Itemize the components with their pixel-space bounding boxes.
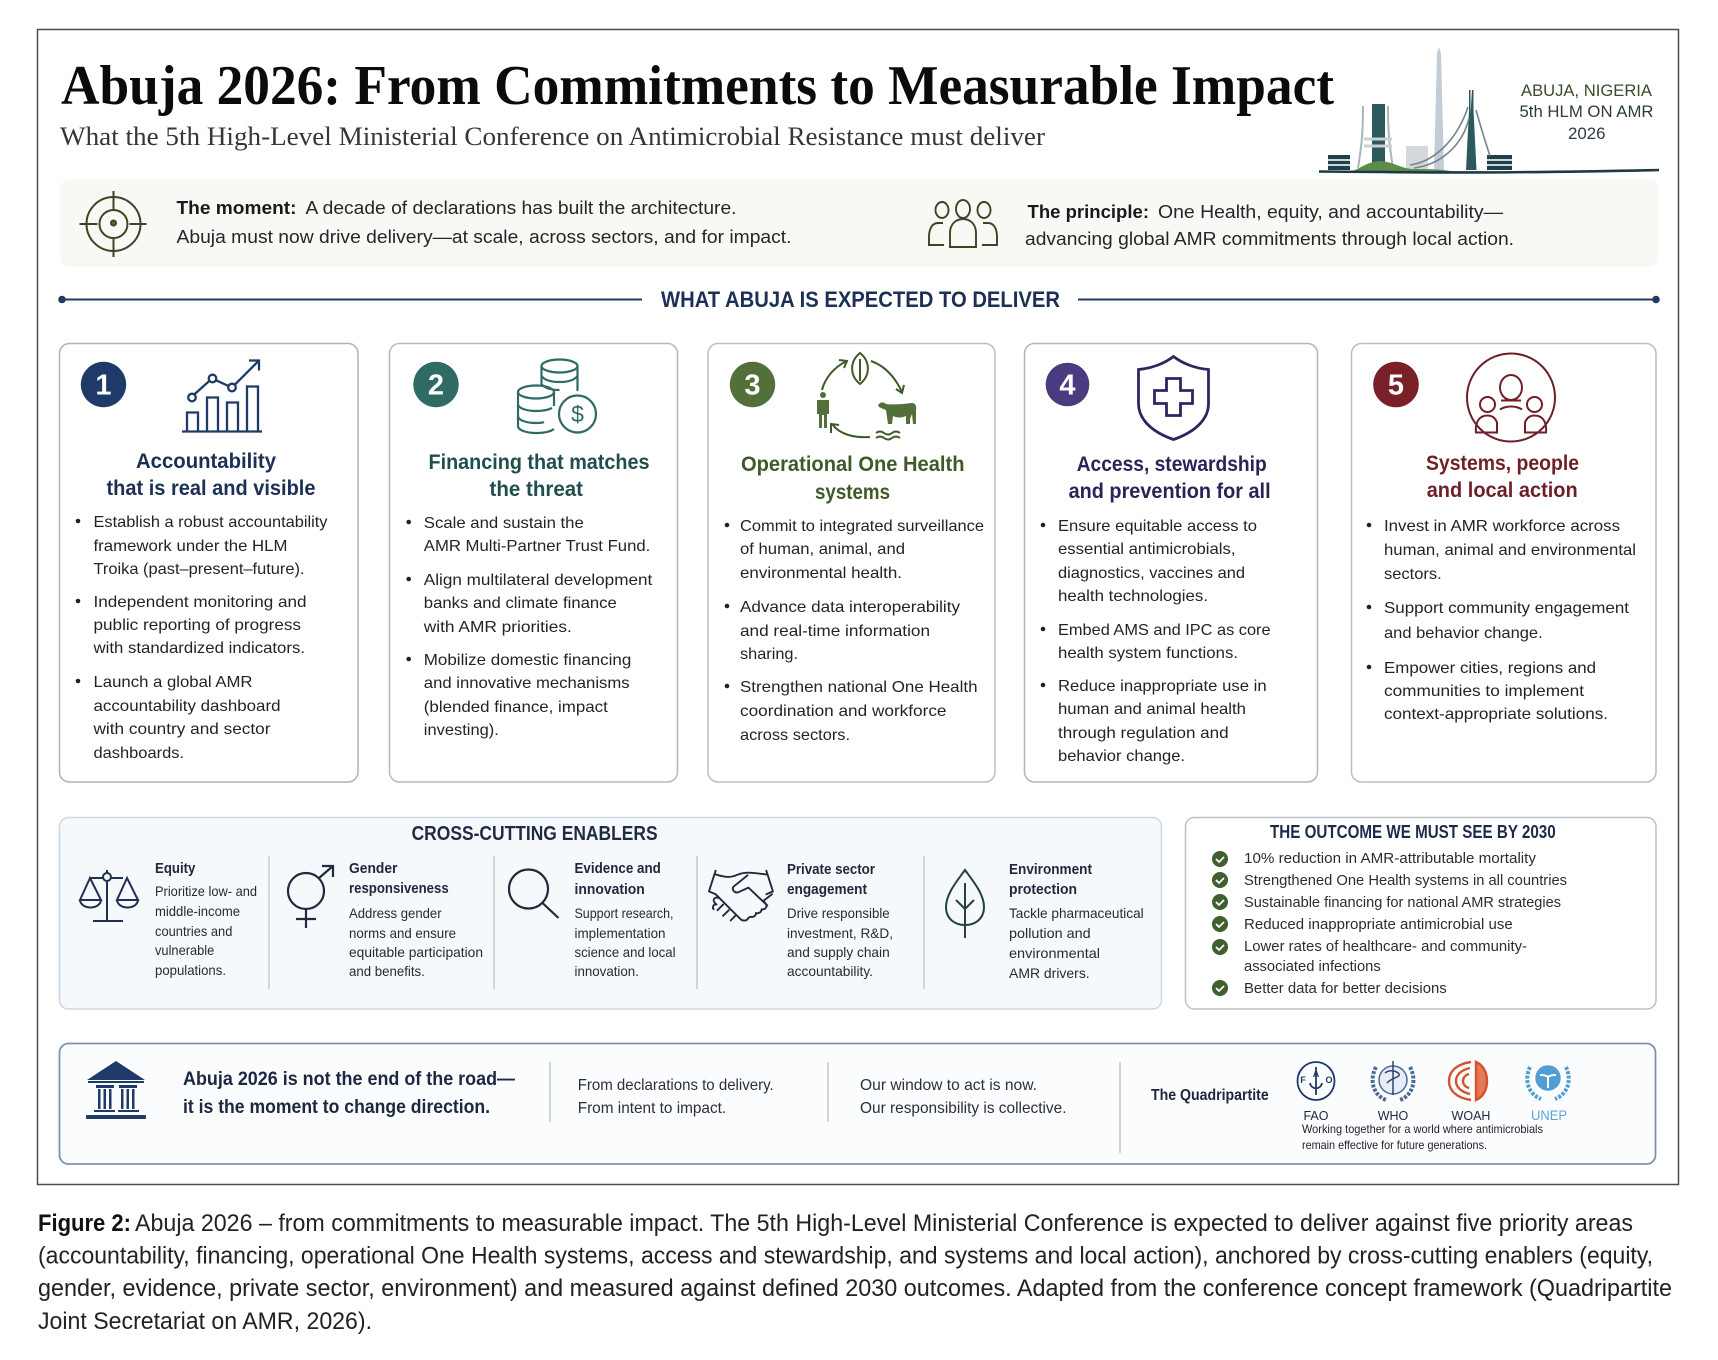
bullet list 1: accountability dashboard	[94, 698, 280, 715]
environment text: AMR drivers.	[1009, 965, 1090, 981]
evidence text	[574, 860, 676, 979]
evidence text: innovation	[574, 881, 645, 898]
call to act: Our window to act is now.	[860, 1077, 1037, 1094]
environment text: Environment	[1009, 861, 1092, 878]
bullet list 2: Scale and sustain the	[424, 515, 584, 532]
bullet list 3: Commit to integrated surveillance	[740, 518, 984, 535]
icon: gender symbol	[288, 866, 333, 928]
panel: priority 1 accountability	[60, 344, 358, 782]
principle text: The principle:	[1028, 201, 1149, 222]
private sector text: accountability.	[787, 963, 873, 979]
bullet list 2: AMR Multi-Partner Trust Fund.	[424, 538, 650, 555]
environment text: pollution and	[1009, 925, 1091, 941]
bullet list 4: Reduce inappropriate use in	[1058, 678, 1267, 695]
bullet list 4: diagnostics, vaccines and	[1058, 565, 1245, 582]
location label	[1520, 82, 1654, 143]
location label: ABUJA, NIGERIA	[1521, 82, 1652, 100]
number badge 3	[730, 362, 775, 407]
closing message: Abuja 2026 is not the end of the road—	[183, 1069, 515, 1090]
bullet list 3: Strengthen national One Health	[740, 679, 978, 696]
icon: coins: $	[571, 401, 584, 427]
bullet list 5: communities to implement	[1384, 683, 1585, 700]
bullet list 2	[406, 515, 653, 739]
bullet list 1: Troika (past–present–future).	[94, 561, 304, 578]
figure caption: gender, evidence, private sector, environment) and measured against defined 2030 outcomes. Adapted from the conference concept framework (Quadripartite	[38, 1275, 1672, 1302]
outcomes list	[1244, 850, 1567, 997]
heading 5	[1426, 452, 1579, 502]
bullet list 4: behavior change.	[1058, 748, 1185, 765]
bullet list 2: with AMR priorities.	[423, 619, 572, 636]
evidence text: implementation	[574, 925, 666, 941]
equity text: vulnerable	[155, 942, 214, 958]
bullet list 2: and innovative mechanisms	[424, 675, 630, 692]
bullet list 1: framework under the HLM	[94, 538, 288, 555]
bullet list 3: across sectors.	[740, 727, 850, 744]
bullet list 4: essential antimicrobials,	[1058, 541, 1236, 558]
gender text: equitable participation	[349, 944, 483, 960]
private sector text: and supply chain	[787, 944, 890, 960]
logo: WOAH: WOAH	[1452, 1109, 1490, 1123]
bullet list 1: Launch a global AMR	[94, 674, 252, 691]
call to act	[860, 1077, 1066, 1117]
bullet list 2: banks and climate finance	[424, 595, 617, 612]
bullet list 5: and behavior change.	[1384, 625, 1543, 642]
gender text	[349, 860, 483, 979]
icon: community circle	[1467, 354, 1555, 442]
number badge 3: 3	[744, 370, 761, 402]
logo: FAO: F	[1300, 1075, 1306, 1085]
heading 1	[106, 450, 316, 500]
closing message: it is the moment to change direction.	[183, 1097, 490, 1118]
bullet list 1: Independent monitoring and	[94, 594, 306, 611]
heading 3	[741, 453, 964, 504]
heading 1: that is real and visible	[106, 477, 316, 500]
icon: shield with cross	[1138, 356, 1208, 440]
section heading: what Abuja is expected to deliver: WHAT ABUJA IS EXPECTED TO DELIVER	[661, 287, 1060, 312]
location label: 2026	[1568, 125, 1606, 143]
number badge 1: 1	[95, 370, 112, 402]
heading 2: Financing that matches	[428, 451, 650, 474]
panel: cross-cutting enablers	[60, 818, 1162, 1009]
icon: coins	[518, 360, 596, 433]
evidence text: innovation.	[574, 963, 639, 979]
heading 3: Operational One Health	[741, 453, 964, 476]
call to delivery	[578, 1077, 774, 1117]
number badge 4: 4	[1059, 370, 1076, 402]
figure caption: Abuja 2026 – from commitments to measurable impact. The 5th High-Level Ministerial Conference is expected to deliver against five priority areas	[135, 1210, 1633, 1237]
principle text: One Health, equity, and accountability—	[1158, 201, 1504, 222]
bullet list 5: context-appropriate solutions.	[1384, 706, 1608, 723]
icon: rising bar chart	[182, 360, 262, 432]
bullet list 5: Invest in AMR workforce across	[1384, 518, 1620, 535]
outcomes list: Strengthened One Health systems in all countries	[1244, 872, 1567, 889]
enabler: evidence	[509, 860, 676, 979]
panel: priority 4 access	[1024, 344, 1318, 782]
bullet list 3: coordination and workforce	[740, 703, 947, 720]
bullet list 4: health technologies.	[1058, 588, 1208, 605]
panel: moment and principle	[60, 179, 1659, 267]
evidence text: Support research,	[574, 905, 674, 921]
number badge 2: 2	[428, 370, 444, 402]
private sector text	[787, 861, 893, 979]
figure caption: Figure 2:	[38, 1210, 131, 1237]
logo: FAO	[1298, 1062, 1334, 1123]
outcomes list: Lower rates of healthcare- and community-	[1244, 938, 1527, 955]
bullet list 2: Mobilize domestic financing	[424, 652, 631, 669]
bullet list 5: Support community engagement	[1384, 600, 1630, 617]
heading 5: Systems, people	[1426, 452, 1579, 475]
enabler: gender	[288, 860, 483, 979]
equity text: Equity	[155, 860, 196, 877]
heading 5: and local action	[1427, 479, 1578, 502]
equity text: countries and	[155, 923, 232, 939]
outcomes heading: THE OUTCOME WE MUST SEE BY 2030	[1270, 822, 1556, 842]
number badge 5	[1373, 362, 1419, 407]
gender text: and benefits.	[349, 963, 425, 979]
logo: UNEP: UNEP	[1531, 1107, 1567, 1123]
panel: priority 3 One Health	[708, 344, 995, 782]
logo: FAO: A	[1313, 1069, 1320, 1079]
number badge 2	[413, 362, 459, 407]
bullet list 1: with country and sector	[92, 721, 271, 738]
moment text: The moment:	[176, 197, 296, 218]
location label: 5th HLM ON AMR	[1520, 103, 1654, 121]
figure caption: (accountability, financing, operational One Health systems, access and stewardship, and systems and local action), anchored by cross-cutting enablers (equity,	[38, 1242, 1653, 1270]
equity text: middle-income	[155, 903, 240, 919]
outcomes list: Better data for better decisions	[1244, 980, 1447, 997]
principle text	[1025, 201, 1514, 249]
bullet list 5: human, animal and environmental	[1384, 542, 1636, 559]
bullet list 3: environmental health.	[740, 565, 902, 582]
heading 4: and prevention for all	[1069, 480, 1271, 503]
evidence text: science and local	[574, 944, 676, 960]
heading 2	[428, 451, 650, 501]
call to delivery: From intent to impact.	[578, 1100, 726, 1117]
number badge 1	[81, 362, 126, 407]
bullet list 1	[76, 514, 328, 762]
moment text: A decade of declarations has built the architecture.	[306, 197, 736, 218]
gender text: Address gender	[349, 905, 442, 921]
panel: priority 2 financing	[390, 344, 678, 782]
bullet list 1: with standardized indicators.	[92, 640, 305, 657]
bullet list 1: public reporting of progress	[94, 617, 301, 634]
icon: One Health cycle	[817, 353, 916, 440]
title: Abuja 2026: From Commitments to Measurable Impact	[61, 55, 1334, 117]
enabler: environment	[946, 861, 1144, 981]
principle text: advancing global AMR commitments through local action.	[1025, 228, 1514, 249]
bullet list 2: investing).	[424, 722, 499, 739]
moment text: Abuja must now drive delivery—at scale, across sectors, and for impact.	[176, 226, 792, 247]
gender text: responsiveness	[349, 880, 449, 897]
environment text: protection	[1009, 881, 1077, 898]
outcomes list: Reduced inappropriate antimicrobial use	[1244, 916, 1513, 933]
equity text	[155, 860, 257, 978]
number badge 5: 5	[1388, 370, 1404, 402]
Quadripartite tagline	[1302, 1122, 1543, 1152]
logo: FAO: FAO	[1303, 1109, 1329, 1123]
enabler: private sector	[709, 861, 893, 979]
outcomes list: associated infections	[1244, 958, 1381, 975]
heading 4: Access, stewardship	[1077, 453, 1267, 476]
private sector text: engagement	[787, 881, 867, 898]
Quadripartite label: The Quadripartite	[1151, 1087, 1269, 1104]
icon: target	[80, 191, 146, 257]
call to delivery: From declarations to delivery.	[578, 1077, 774, 1094]
gender text: norms and ensure	[349, 925, 456, 941]
bullet list 3: of human, animal, and	[740, 541, 905, 558]
header	[60, 55, 1334, 151]
outcomes list: Sustainable financing for national AMR strategies	[1244, 894, 1561, 911]
equity text: populations.	[155, 962, 226, 978]
private sector text: Private sector	[787, 861, 875, 878]
bullet list 5: sectors.	[1384, 566, 1442, 583]
heading 3: systems	[815, 481, 890, 504]
evidence text: Evidence and	[574, 860, 661, 877]
moment text	[176, 197, 792, 247]
bullet list 2: Align multilateral development	[424, 572, 653, 589]
section heading: what Abuja is expected to deliver	[58, 287, 1660, 312]
bullet list 1: dashboards.	[94, 745, 184, 762]
bullet list 4: human and animal health	[1058, 701, 1246, 718]
bullet list 5	[1367, 518, 1636, 723]
panel: priority 5 systems	[1352, 344, 1656, 782]
environment text: Tackle pharmaceutical	[1009, 905, 1144, 921]
enabler: equity	[80, 860, 257, 978]
icon: magnifier	[509, 870, 558, 918]
icon: handshake	[709, 871, 773, 921]
outcomes list: 10% reduction in AMR-attributable mortality	[1244, 850, 1537, 867]
logo: UNEP	[1527, 1066, 1569, 1123]
heading 4	[1069, 453, 1271, 503]
icon: people	[929, 200, 997, 247]
bullet list 4: Ensure equitable access to	[1058, 518, 1257, 535]
equity text: Prioritize low- and	[155, 883, 257, 899]
icon: scales	[80, 870, 138, 921]
bullet list 4: through regulation and	[1058, 725, 1229, 742]
enablers heading: CROSS-CUTTING ENABLERS	[412, 823, 658, 845]
call to act: Our responsibility is collective.	[860, 1100, 1066, 1117]
gender text: Gender	[349, 860, 398, 877]
environment text	[1009, 861, 1144, 981]
bullet list 5: Empower cities, regions and	[1384, 660, 1596, 677]
bullet list 3: sharing.	[740, 646, 798, 663]
bullet list 4	[1041, 518, 1271, 765]
bullet list 4: Embed AMS and IPC as core	[1058, 622, 1271, 639]
private sector text: investment, R&D,	[787, 925, 893, 941]
heading 1: Accountability	[136, 450, 276, 473]
closing message	[183, 1069, 515, 1118]
number badge 4	[1046, 363, 1089, 406]
illustration: Abuja skyline	[1319, 47, 1659, 172]
bullet list 1: Establish a robust accountability	[94, 514, 328, 531]
bullet list 4: health system functions.	[1058, 645, 1238, 662]
logo: WOAH	[1449, 1062, 1490, 1123]
bullet list 3	[725, 518, 984, 744]
heading 2: the threat	[490, 478, 583, 501]
panel: closing banner	[60, 1044, 1656, 1164]
logo: WHO	[1373, 1061, 1413, 1123]
figure caption: Joint Secretariat on AMR, 2026).	[38, 1308, 372, 1335]
bullet list 3: and real-time information	[740, 623, 930, 640]
icon: institution	[86, 1061, 146, 1119]
check icons	[1212, 851, 1228, 996]
logo: FAO: O	[1325, 1075, 1333, 1085]
Quadripartite tagline: Working together for a world where antimicrobials	[1302, 1122, 1543, 1136]
subtitle: What the 5th High-Level Ministerial Conference on Antimicrobial Resistance must deliver	[60, 122, 1045, 151]
private sector text: Drive responsible	[787, 905, 890, 921]
icon: leaf	[946, 870, 984, 938]
environment text: environmental	[1009, 945, 1100, 961]
bullet list 3: Advance data interoperability	[740, 599, 960, 616]
panel: 2030 outcomes	[1186, 818, 1656, 1009]
figure caption	[38, 1210, 1672, 1335]
Quadripartite tagline: remain effective for future generations.	[1302, 1138, 1487, 1152]
logo: WHO: WHO	[1378, 1109, 1409, 1123]
bullet list 2: (blended finance, impact	[424, 699, 608, 716]
